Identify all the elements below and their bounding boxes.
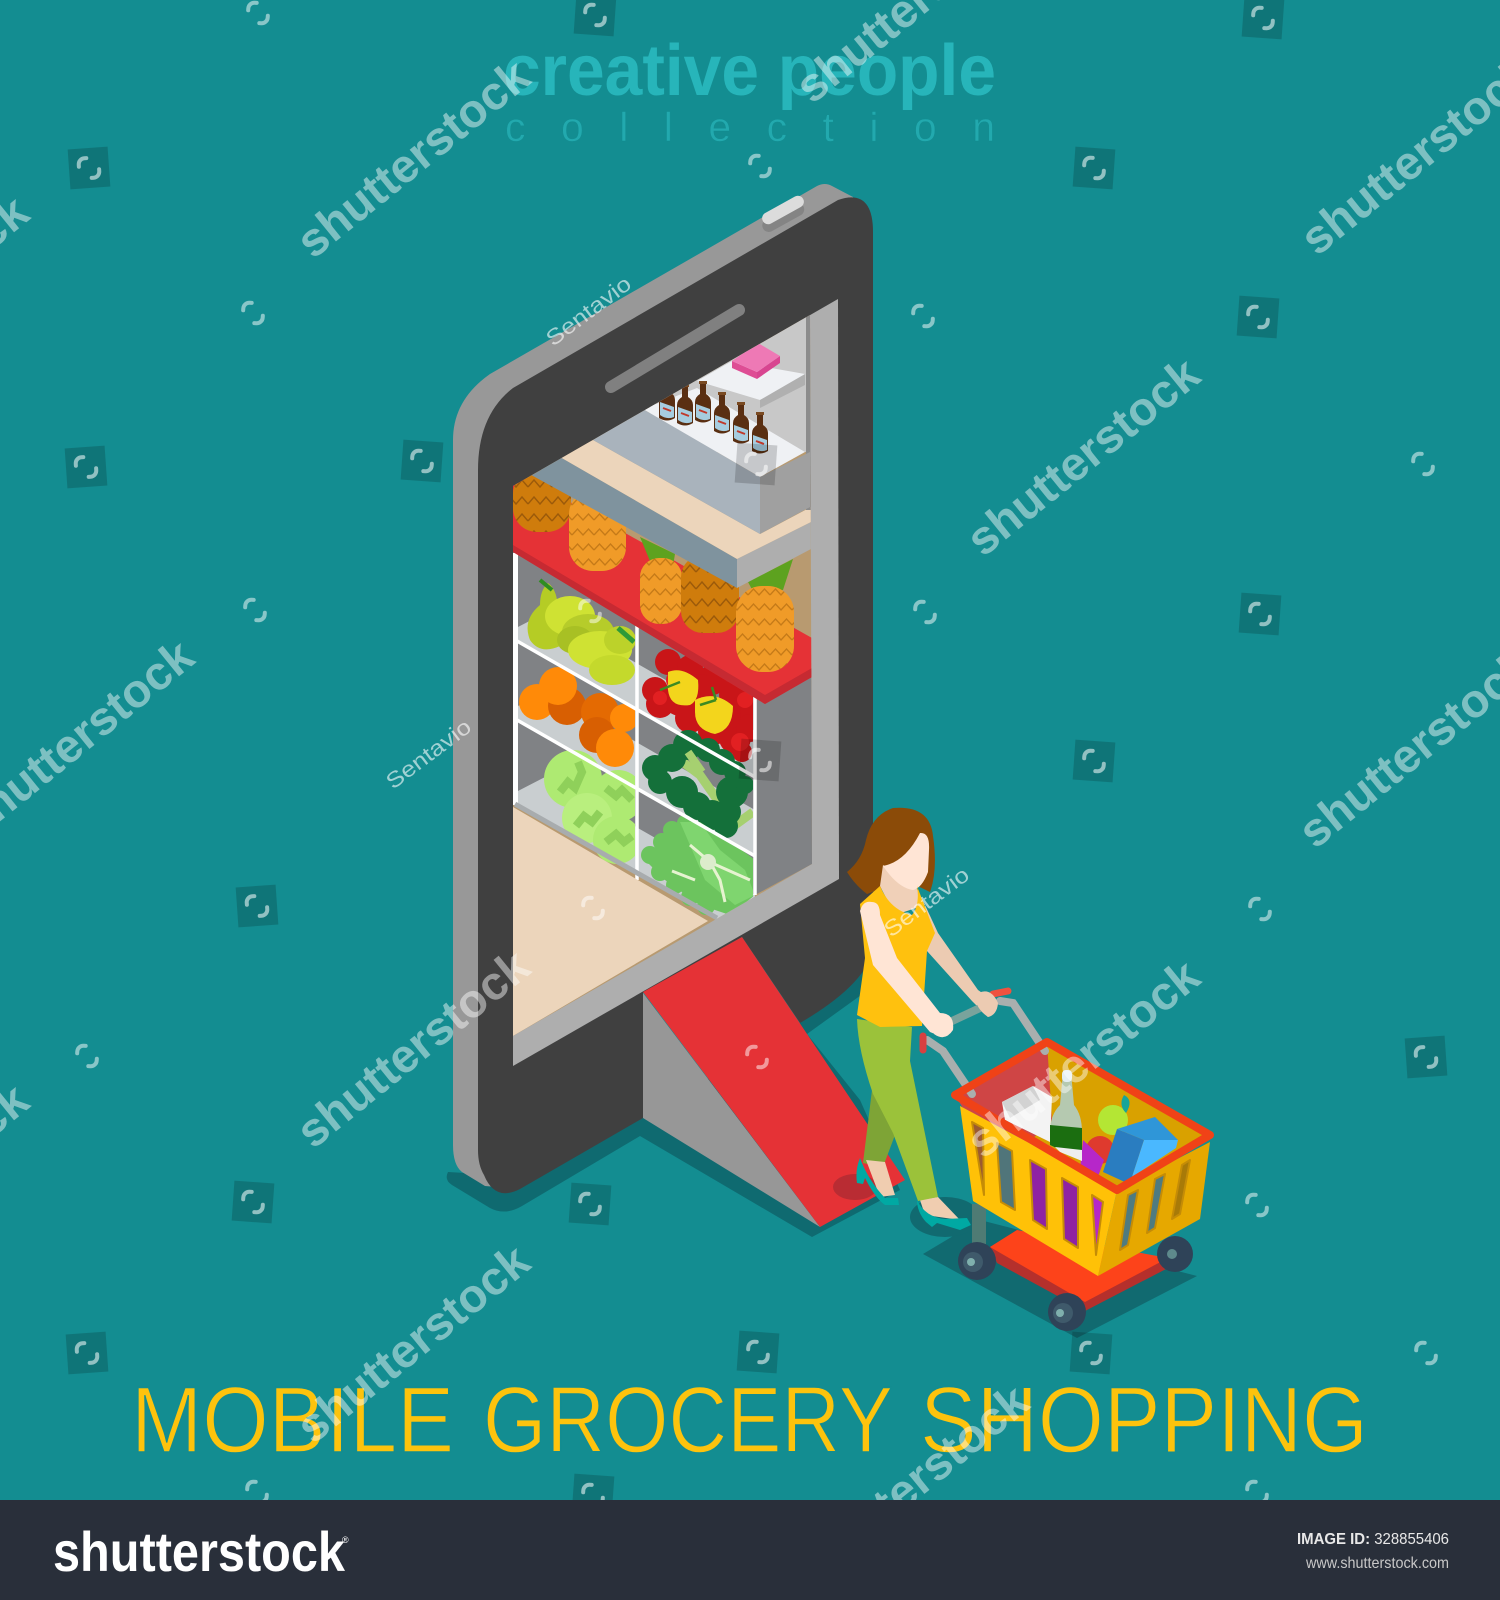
white shelf frames — [516, 553, 755, 895]
beige floor — [513, 807, 708, 1036]
wine bottle — [1050, 1070, 1082, 1161]
shutterstock watermarks: shutterstock — [286, 48, 540, 268]
smartphone — [453, 184, 873, 1193]
screen frame — [513, 299, 839, 1066]
broccoli — [642, 730, 754, 838]
Sentavio watermarks: Sentavio — [541, 271, 636, 351]
speaker — [611, 310, 739, 387]
phone face — [478, 197, 873, 1193]
website: www.shutterstock.com — [1305, 1555, 1449, 1572]
rear post — [972, 1204, 986, 1244]
base — [990, 1230, 1168, 1311]
white box — [1002, 1086, 1052, 1142]
image id: IMAGE ID: 328855406 — [1297, 1531, 1449, 1548]
shelf base rim — [515, 804, 717, 918]
home button — [760, 194, 807, 234]
red apple — [1086, 1136, 1114, 1164]
phone side edge — [453, 184, 860, 1189]
blue box — [1103, 1117, 1178, 1183]
lettuce — [641, 815, 755, 915]
shopping cart — [923, 991, 1210, 1331]
pink box — [732, 343, 780, 379]
upper white shelf — [697, 361, 805, 408]
cabbages — [544, 750, 644, 864]
basket left face — [960, 1106, 1117, 1276]
inner right wall — [755, 670, 812, 895]
far foot — [856, 1158, 899, 1205]
woman shadow — [910, 1197, 980, 1237]
shutterstock watermarks: shutterstock — [286, 1233, 540, 1453]
basket rim — [955, 1042, 1210, 1190]
hair back — [847, 808, 935, 894]
shutterstock watermarks: shutterstock — [785, 1373, 1039, 1593]
store interior — [513, 300, 812, 1040]
cart shadow — [923, 1220, 1197, 1338]
shelf floors — [518, 622, 755, 920]
shutterstock watermarks: shutterstock — [286, 938, 540, 1158]
pants — [857, 1019, 938, 1201]
footer bar — [0, 1500, 1500, 1600]
red shelf — [513, 470, 812, 704]
interior back walls — [955, 1042, 1210, 1190]
far leg — [863, 1090, 895, 1167]
shutterstock watermarks: shutterstock — [956, 948, 1210, 1168]
back wall upper — [650, 316, 806, 452]
handle bar — [923, 991, 1045, 1094]
basket slots — [972, 1122, 1190, 1255]
Sentavio watermarks: Sentavio — [879, 862, 974, 942]
brand logo: creative people collection — [503, 31, 996, 150]
peppers — [642, 649, 764, 762]
basket right face — [1098, 1142, 1210, 1276]
red ramp — [643, 937, 905, 1227]
grey counter — [593, 409, 810, 534]
upper beige platform — [513, 440, 811, 588]
title: GROCERY — [483, 1367, 893, 1472]
Sentavio watermarks: Sentavio — [381, 714, 476, 794]
back walls — [513, 300, 812, 1040]
rear wheel — [1157, 1236, 1193, 1272]
woman pushing cart — [847, 808, 998, 1230]
registered mark: ® — [342, 1535, 349, 1545]
title: MOBILE — [131, 1367, 454, 1472]
beer bottles — [659, 379, 768, 454]
near foot — [917, 1197, 971, 1230]
Sentavio watermarks — [381, 271, 974, 942]
near arm — [860, 902, 952, 1037]
pears — [528, 580, 636, 685]
title: SHOPPING — [920, 1367, 1368, 1472]
oranges — [519, 667, 638, 767]
pineapples — [513, 470, 794, 672]
neck — [880, 865, 925, 915]
phone shadow — [447, 950, 900, 1237]
hands — [934, 991, 998, 1037]
produce unit back wall — [513, 550, 755, 900]
brand logo: creative people collection: collection — [505, 104, 995, 150]
shutterstock watermarks: shutterstock — [956, 346, 1210, 566]
yellow top — [857, 886, 935, 1027]
footer logo: shutterstock — [53, 1520, 346, 1583]
brand logo: creative people collection: creative people — [503, 31, 996, 111]
far arm — [925, 905, 998, 1017]
green apple — [1098, 1095, 1130, 1135]
title — [131, 1367, 1368, 1472]
face — [883, 833, 929, 890]
lower white shelf — [643, 388, 805, 477]
front wheels — [958, 1242, 1086, 1331]
purple bag — [1080, 1140, 1104, 1185]
